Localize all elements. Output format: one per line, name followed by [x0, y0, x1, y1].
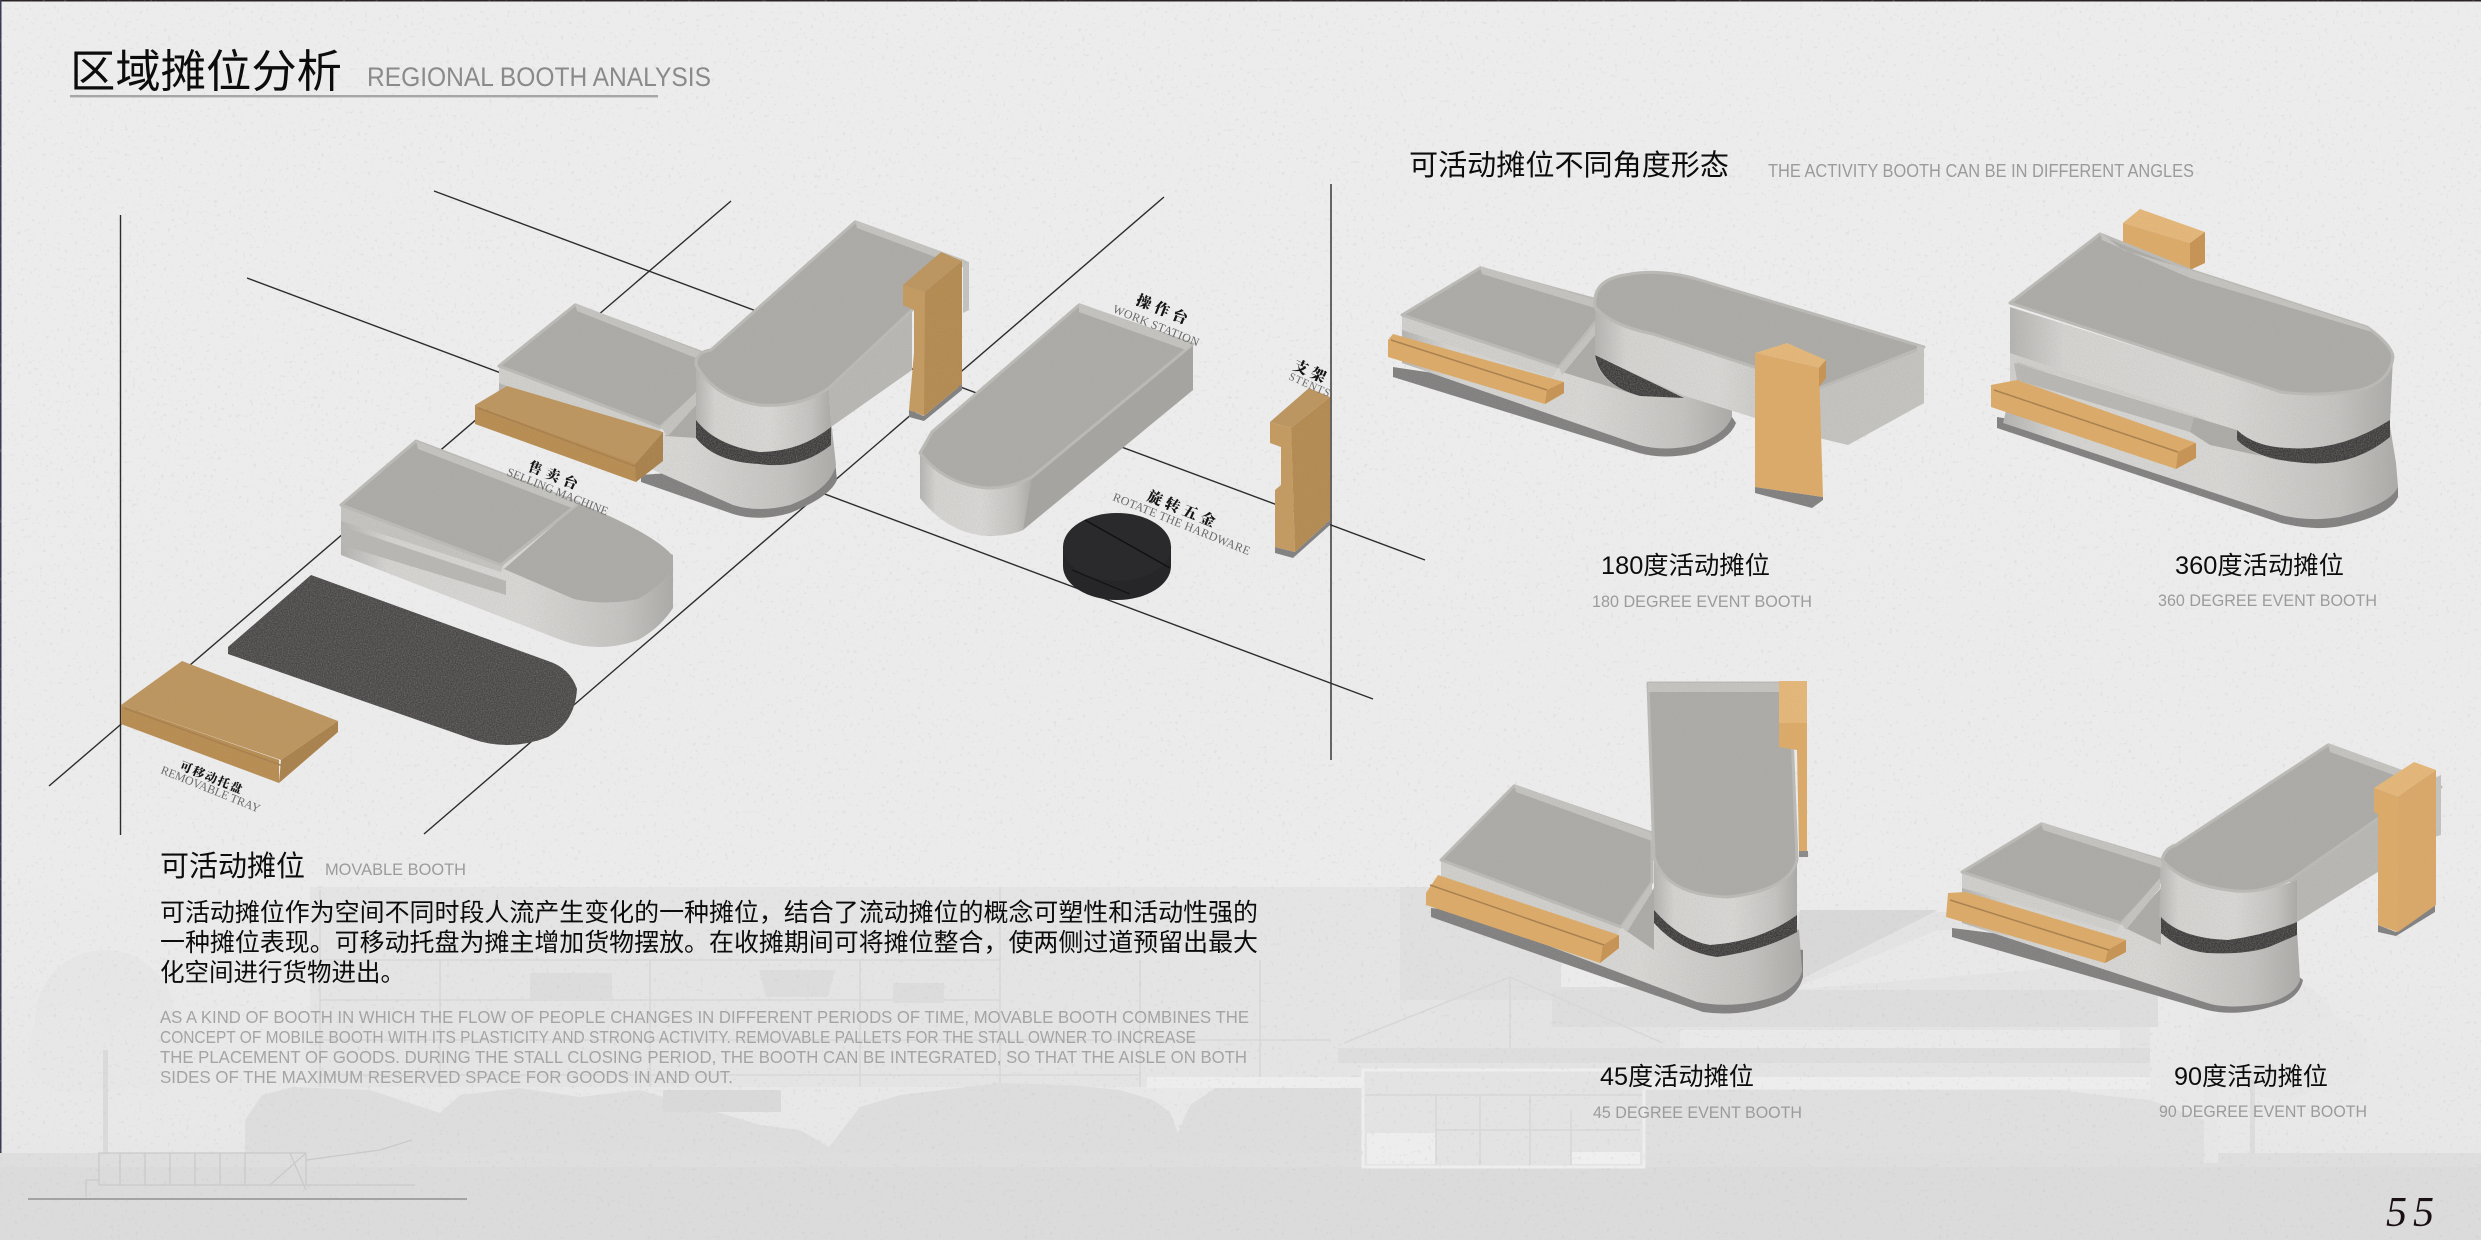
label: rotate the hardware: ROTATE THE HARDWARE — [1111, 490, 1252, 558]
exploded view: removable wood tray — [121, 661, 338, 783]
wood tray — [1946, 892, 2126, 963]
stand wood — [903, 252, 962, 421]
label: removable tray: 可移动托盘 — [178, 757, 245, 797]
caption 180 — [1592, 552, 1812, 611]
stand wood — [1779, 681, 1808, 857]
page number: 55 — [2386, 1190, 2434, 1236]
label: selling machine: SELLING MACHINE — [505, 465, 610, 518]
label: stents: 支架 — [1290, 354, 1330, 387]
caption 90 — [2159, 1063, 2367, 1121]
movable booth description english: AS A KIND OF BOOTH IN WHICH THE FLOW OF PEOPLE CHANGES IN DIFFERENT PERIODS OF TIME, MOVABLE BOOTH COMBINES THE — [160, 1007, 1249, 1027]
right panel heading: 可活动摊位不同角度形态 — [1409, 149, 1729, 182]
ground and hedge silhouettes — [0, 1077, 2481, 1240]
movable booth description chinese: 可活动摊位作为空间不同时段人流产生变化的一种摊位，结合了流动摊位的概念可塑性和活动性强的 — [160, 899, 1258, 927]
movable booth description english: THE PLACEMENT OF GOODS. DURING THE STALL CLOSING PERIOD, THE BOOTH CAN BE INTEGRATED, SO THAT THE AISLE ON BOTH — [160, 1047, 1247, 1067]
title: 区域摊位分析 — [70, 46, 342, 97]
exploded view: dark base plate — [228, 575, 577, 745]
movable booth description chinese: 化空间进行货物进出。 — [160, 959, 405, 987]
exploded view: rotating hardware disc — [1063, 513, 1171, 600]
front wood tray — [1991, 380, 2196, 469]
right panel heading: THE ACTIVITY BOOTH CAN BE IN DIFFERENT ANGLES — [1768, 161, 2194, 181]
movable booth description chinese — [160, 899, 1258, 987]
label: selling machine: 售卖台 — [525, 456, 582, 494]
ghosted section box — [1363, 1070, 1644, 1167]
exploded view: assembled booth at top — [475, 220, 969, 518]
booth at 360 degrees — [1991, 209, 2398, 528]
movable booth heading — [160, 850, 466, 883]
caption 45: 45 DEGREE EVENT BOOTH — [1593, 1103, 1802, 1122]
caption 90: 90度活动摊位 — [2174, 1063, 2328, 1091]
exploded diagram guide lines — [49, 184, 1425, 835]
wood tray — [1388, 334, 1564, 404]
caption 45: 45度活动摊位 — [1600, 1063, 1754, 1091]
ghosted small pavilion — [86, 1140, 415, 1197]
movable booth description english: CONCEPT OF MOBILE BOOTH WITH ITS PLASTICITY AND STRONG ACTIVITY. REMOVABLE PALLETS FOR THE STALL OWNER TO INCREASE — [160, 1027, 1196, 1047]
booth at 90 degrees — [1946, 743, 2441, 1013]
wood tray — [1426, 875, 1619, 963]
movable booth heading: MOVABLE BOOTH — [325, 861, 466, 879]
movable booth heading: 可活动摊位 — [160, 850, 305, 883]
title: REGIONAL BOOTH ANALYSIS — [367, 62, 711, 92]
ghosted trees — [28, 950, 2368, 1163]
label: stents: STENTS — [1287, 371, 1332, 400]
movable booth description chinese: 一种摊位表现。可移动托盘为摊主增加货物摆放。在收摊期间可将摊位整合，使两侧过道预留出最大 — [160, 929, 1258, 957]
movable booth description english — [160, 1007, 1249, 1087]
caption 180: 180 DEGREE EVENT BOOTH — [1592, 592, 1812, 611]
ghosted building section backdrop — [0, 887, 2481, 1240]
selling tray wood — [475, 386, 663, 482]
label: removable tray: REMOVABLE TRAY — [159, 763, 263, 816]
booth at 45 degrees — [1426, 681, 1808, 1014]
back wood stand — [2123, 209, 2205, 270]
stand — [1755, 343, 1826, 508]
label: stents — [1287, 354, 1332, 400]
caption 45 — [1593, 1063, 1802, 1122]
caption 360 — [2158, 552, 2377, 610]
caption 180: 180度活动摊位 — [1601, 552, 1770, 580]
bottom-left rule — [28, 1198, 467, 1200]
label: work station: 操作台 — [1133, 289, 1192, 329]
booth at 180 degrees — [1388, 266, 1924, 508]
title — [70, 46, 711, 97]
exploded view: wood stents — [1270, 388, 1330, 558]
caption 90: 90 DEGREE EVENT BOOTH — [2159, 1102, 2367, 1121]
label: work station: WORK STATION — [1111, 302, 1202, 349]
caption 360: 360度活动摊位 — [2175, 552, 2344, 580]
label: rotate the hardware: 旋转五金 — [1144, 485, 1219, 532]
right panel heading — [1409, 149, 2194, 182]
stand wood — [2374, 762, 2436, 936]
exploded view: middle counter — [341, 441, 673, 647]
movable booth description english: SIDES OF THE MAXIMUM RESERVED SPACE FOR GOODS IN AND OUT. — [160, 1067, 733, 1087]
caption 360: 360 DEGREE EVENT BOOTH — [2158, 591, 2377, 610]
exploded view: work station — [920, 303, 1193, 536]
